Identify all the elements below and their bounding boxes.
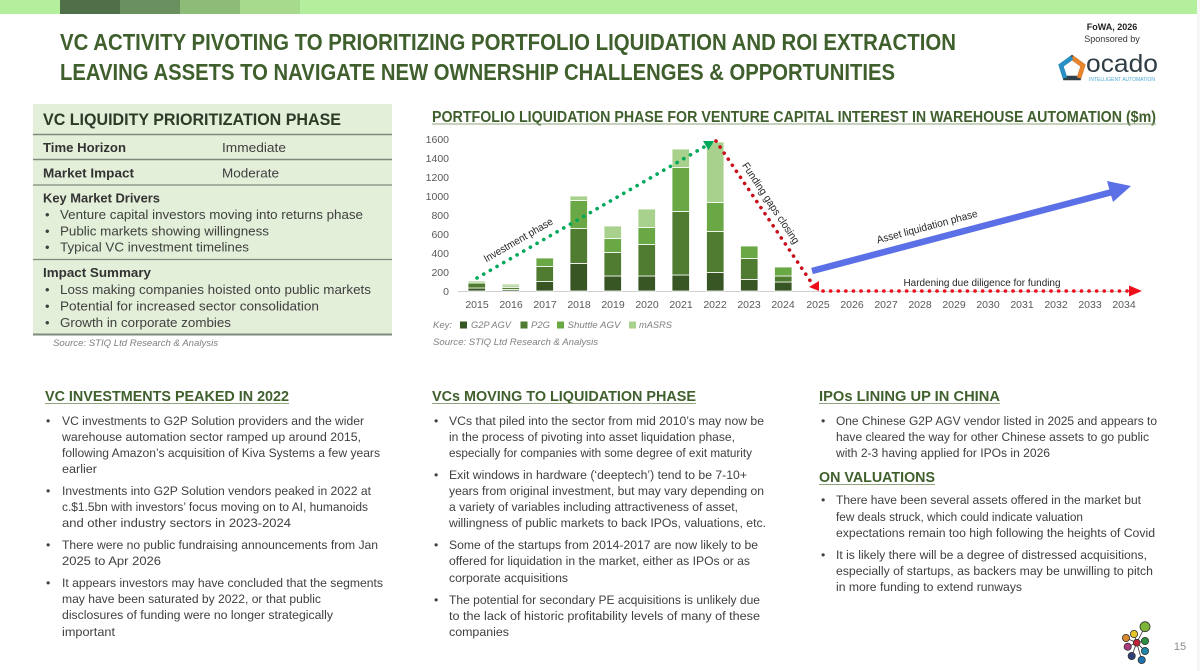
bullet: no announcements: • [46, 538, 50, 552]
column: VCs moving to liquidation phase [432, 389, 766, 639]
bullet: exit windows: years from original investment, but may vary depending on [449, 484, 764, 498]
key market drivers: • [45, 240, 50, 254]
arrow: hardening due diligence: Hardening due diligence for funding [904, 277, 1061, 289]
bullet: Chinese vendor: have cleared the way for other Chinese assets to go public [836, 430, 1149, 444]
bar 2021 [672, 149, 690, 291]
y axis labels: 800 [431, 210, 449, 222]
bar 2024 [774, 267, 792, 291]
market impact row: Moderate [222, 166, 279, 180]
bullet: ramp up: • [46, 414, 50, 428]
column: VC investments peaked in 2022 [45, 389, 383, 639]
bullet: few deals: There have been several assets offered in the market but [836, 493, 1142, 507]
sponsor block: FoWA, 2026 [1087, 22, 1137, 32]
sponsor block: INTELLIGENT AUTOMATION [1089, 77, 1155, 83]
impact summary [43, 265, 372, 330]
x axis labels: 2017 [533, 299, 557, 311]
bullet: peak: Investments into G2P Solution vendors peaked in 2022 at [62, 484, 372, 498]
bullet: ramp up: earlier [62, 462, 97, 476]
y axis labels: 0 [443, 286, 449, 298]
bullet: ramp up: following Amazon’s acquisition of Kiva Systems a few years [62, 446, 380, 460]
heading: ON VALUATIONS [819, 470, 935, 486]
bullet: pivoting: VCs that piled into the sector from mid 2010’s may now be [449, 414, 764, 428]
bullet: exit windows: • [434, 468, 438, 482]
bullet: distressed acquisitions: • [821, 548, 825, 562]
x axis labels: 2024 [771, 299, 795, 311]
bullet: few deals [821, 493, 1155, 540]
bullet: exit windows: a variety of variables including attractiveness of asset, [449, 500, 738, 514]
key market drivers: Key Market Drivers [43, 190, 160, 206]
chart key: Shuttle AGV [568, 320, 622, 331]
arrow: hardening due diligence [823, 277, 1142, 296]
x axis labels: 2015 [465, 299, 489, 311]
bullet: Chinese vendor [821, 414, 1157, 460]
bullet: Chinese vendor: One Chinese G2P AGV vendor listed in 2025 and appears to [836, 414, 1157, 428]
column: IPOs and valuations [819, 389, 1157, 594]
chart key [433, 320, 673, 331]
arrow: investment phase: Investment phase [482, 216, 555, 265]
heading: VC INVESTMENTS PEAKED IN 2022 [45, 389, 289, 405]
x axis labels: 2030 [976, 299, 1000, 311]
bullet: peak [46, 484, 372, 530]
key market drivers: • [45, 224, 50, 238]
bullet: few deals: expectations remain too high following the heights of Covid [836, 526, 1155, 540]
bullet: Chinese vendor: with 2-3 having applied for IPOs in 2026 [835, 446, 1050, 460]
y axis labels: 1600 [426, 134, 449, 146]
key market drivers: Typical VC investment timelines [60, 240, 250, 254]
key market drivers [43, 190, 363, 254]
bar 2015 [468, 281, 486, 291]
x axis labels: 2034 [1112, 299, 1136, 311]
bullet: no announcements [46, 538, 378, 568]
bullet: no announcements: There were no public fundraising announcements from Jan [62, 538, 378, 552]
bullet: saturation: important [62, 625, 116, 639]
arrow: funding gaps closing: Funding gaps closing [739, 160, 802, 246]
x axis labels [465, 299, 1136, 311]
y axis labels: 600 [431, 229, 449, 241]
bullet: secondary PE [434, 593, 760, 639]
icon: ocado pentagon logo [1061, 58, 1083, 78]
bullet: pivoting: • [434, 414, 438, 428]
bullet: startups [434, 538, 758, 585]
chart key: P2G [531, 320, 550, 331]
arrow: funding gaps closing [716, 141, 819, 291]
x axis labels: 2016 [499, 299, 523, 311]
x axis labels: 2032 [1044, 299, 1068, 311]
bullet: distressed acquisitions [821, 548, 1153, 594]
title: VC ACTIVITY PIVOTING TO PRIORITIZING PORTFOLIO LIQUIDATION AND ROI EXTRACTION [60, 29, 956, 55]
bullet: peak: c.$1.5bn with investors’ focus moving on to AI, humanoids [62, 500, 368, 514]
bar 2020 [638, 209, 656, 291]
y axis labels: 400 [431, 248, 449, 260]
x axis labels: 2028 [908, 299, 932, 311]
time horizon row: Immediate [222, 140, 286, 155]
key market drivers: Public markets showing willingness [60, 224, 270, 238]
bullet: few deals: few deals struck, which could indicate valuation [836, 510, 1083, 524]
chart key: mASRS [639, 320, 673, 331]
source note: chart: Source: STIQ Ltd Research & Analysis [433, 337, 598, 348]
x axis labels: 2019 [601, 299, 625, 311]
icon: network node logo [1122, 622, 1150, 664]
bullet: pivoting: especially for companies with some degree of exit maturity [449, 446, 753, 460]
y axis labels [426, 134, 449, 298]
bullet: ramp up: VC investments to G2P Solution providers and the wider [62, 414, 364, 428]
bar chart [426, 134, 1136, 311]
bullet: pivoting [434, 414, 764, 460]
bar 2018 [570, 196, 588, 291]
bullet: distressed acquisitions: It is likely there will be a degree of distressed acquisitions, [836, 548, 1147, 562]
chart heading: PORTFOLIO LIQUIDATION PHASE FOR VENTURE CAPITAL INTEREST IN WAREHOUSE AUTOMATION ($m) [432, 109, 1156, 126]
market impact row: Market Impact [43, 166, 135, 180]
bar 2023 [740, 246, 758, 291]
title: LEAVING ASSETS TO NAVIGATE NEW OWNERSHIP CHALLENGES & OPPORTUNITIES [60, 59, 895, 85]
page number: 15 [1174, 641, 1186, 653]
bullet: peak: and other industry sectors in 2023-2024 [62, 516, 291, 530]
bar 2016 [502, 284, 520, 291]
x axis labels: 2021 [669, 299, 693, 311]
sponsor block: ocado [1086, 50, 1158, 78]
bullet: pivoting: in the process of pivoting into asset liquidation phase, [449, 430, 735, 444]
time horizon row: Time Horizon [43, 140, 126, 155]
bullet: Chinese vendor: • [821, 414, 825, 428]
bar 2019 [604, 226, 622, 291]
impact summary: • [45, 298, 50, 314]
x axis labels: 2025 [806, 299, 830, 311]
bullet: secondary PE: • [434, 593, 438, 607]
key market drivers: • [45, 207, 50, 222]
impact summary: Growth in corporate zombies [60, 315, 232, 330]
bullet: peak: • [46, 484, 50, 498]
stacked bars [468, 142, 792, 291]
arrow: investment phase [477, 141, 714, 278]
impact summary: Loss making companies hoisted onto public markets [60, 282, 372, 297]
bar 2022 [706, 142, 724, 291]
x axis labels: 2026 [840, 299, 864, 311]
bullet: saturation: • [46, 576, 50, 590]
x axis labels: 2029 [942, 299, 966, 311]
x axis labels: 2018 [567, 299, 591, 311]
impact summary: Potential for increased sector consolidation [60, 298, 319, 314]
chart key: G2P AGV [471, 320, 513, 331]
bullet: few deals: • [821, 493, 825, 507]
impact summary: Impact Summary [43, 265, 152, 280]
bullet: startups: • [434, 538, 438, 552]
y axis labels: 1400 [426, 153, 449, 165]
top banner [0, 0, 1197, 14]
x axis labels: 2022 [703, 299, 727, 311]
x axis labels: 2023 [737, 299, 761, 311]
title [60, 29, 956, 85]
bullet: saturation [46, 576, 383, 639]
x axis labels: 2033 [1078, 299, 1102, 311]
bullet: saturation: may have been saturated by 2022, or that public [62, 592, 321, 606]
x axis labels: 2031 [1010, 299, 1034, 311]
bullet: saturation: It appears investors may have concluded that the segments [62, 576, 383, 590]
impact summary: • [45, 282, 50, 297]
bullet: secondary PE: to the lack of historic profitability levels of many of these [449, 609, 760, 623]
sponsor block: Sponsored by [1084, 34, 1140, 44]
bullet: distressed acquisitions: in more funding to extend runways [836, 580, 1022, 594]
bullet: startups: Some of the startups from 2014-2017 are now likely to be [449, 538, 758, 552]
key market drivers: Venture capital investors moving into returns phase [60, 207, 363, 222]
y axis labels: 1200 [426, 172, 449, 184]
x axis labels: 2027 [874, 299, 898, 311]
heading: VCs MOVING TO LIQUIDATION PHASE [432, 389, 696, 405]
market impact row [43, 166, 279, 180]
bullet: startups: offered for liquidation in the market, either as IPOs or as [449, 554, 750, 568]
bullet: exit windows [434, 468, 766, 530]
bullet: ramp up [46, 414, 380, 476]
bullet: secondary PE: companies [449, 625, 509, 639]
y axis labels: 200 [431, 267, 449, 279]
panel: VC liquidity prioritization phase [33, 104, 392, 335]
bullet: secondary PE: The potential for secondary PE acquisitions is unlikely due [449, 593, 760, 607]
time horizon row [43, 140, 286, 155]
chart key: Key: [433, 320, 452, 331]
panel heading: VC LIQUIDITY PRIORITIZATION PHASE [43, 110, 341, 129]
x axis labels: 2020 [635, 299, 659, 311]
bullet: saturation: disclosures of funding were no longer strategically [62, 608, 334, 622]
bullet: exit windows: willingness of public markets to back IPOs, valuations, etc. [448, 516, 766, 530]
bullet: no announcements: 2025 to Apr 2026 [62, 554, 161, 568]
bullet: exit windows: Exit windows in hardware (‘deeptech’) tend to be 7-10+ [449, 468, 747, 482]
source note: left panel: Source: STIQ Ltd Research & Analysis [53, 338, 218, 349]
sponsor block [1061, 22, 1158, 83]
bullet: ramp up: warehouse automation sector ramped up around 2015, [61, 430, 361, 444]
arrow: asset liquidation phase [812, 181, 1131, 271]
bullet: distressed acquisitions: especially of startups, as backers may be unwilling to pitch [836, 564, 1153, 578]
arrow: asset liquidation phase: Asset liquidation phase [875, 208, 979, 246]
bullet: startups: corporate acquisitions [449, 571, 568, 585]
heading: IPOs LINING UP IN CHINA [819, 389, 1001, 405]
bar 2017 [536, 258, 554, 291]
impact summary: • [45, 315, 50, 330]
y axis labels: 1000 [426, 191, 449, 203]
